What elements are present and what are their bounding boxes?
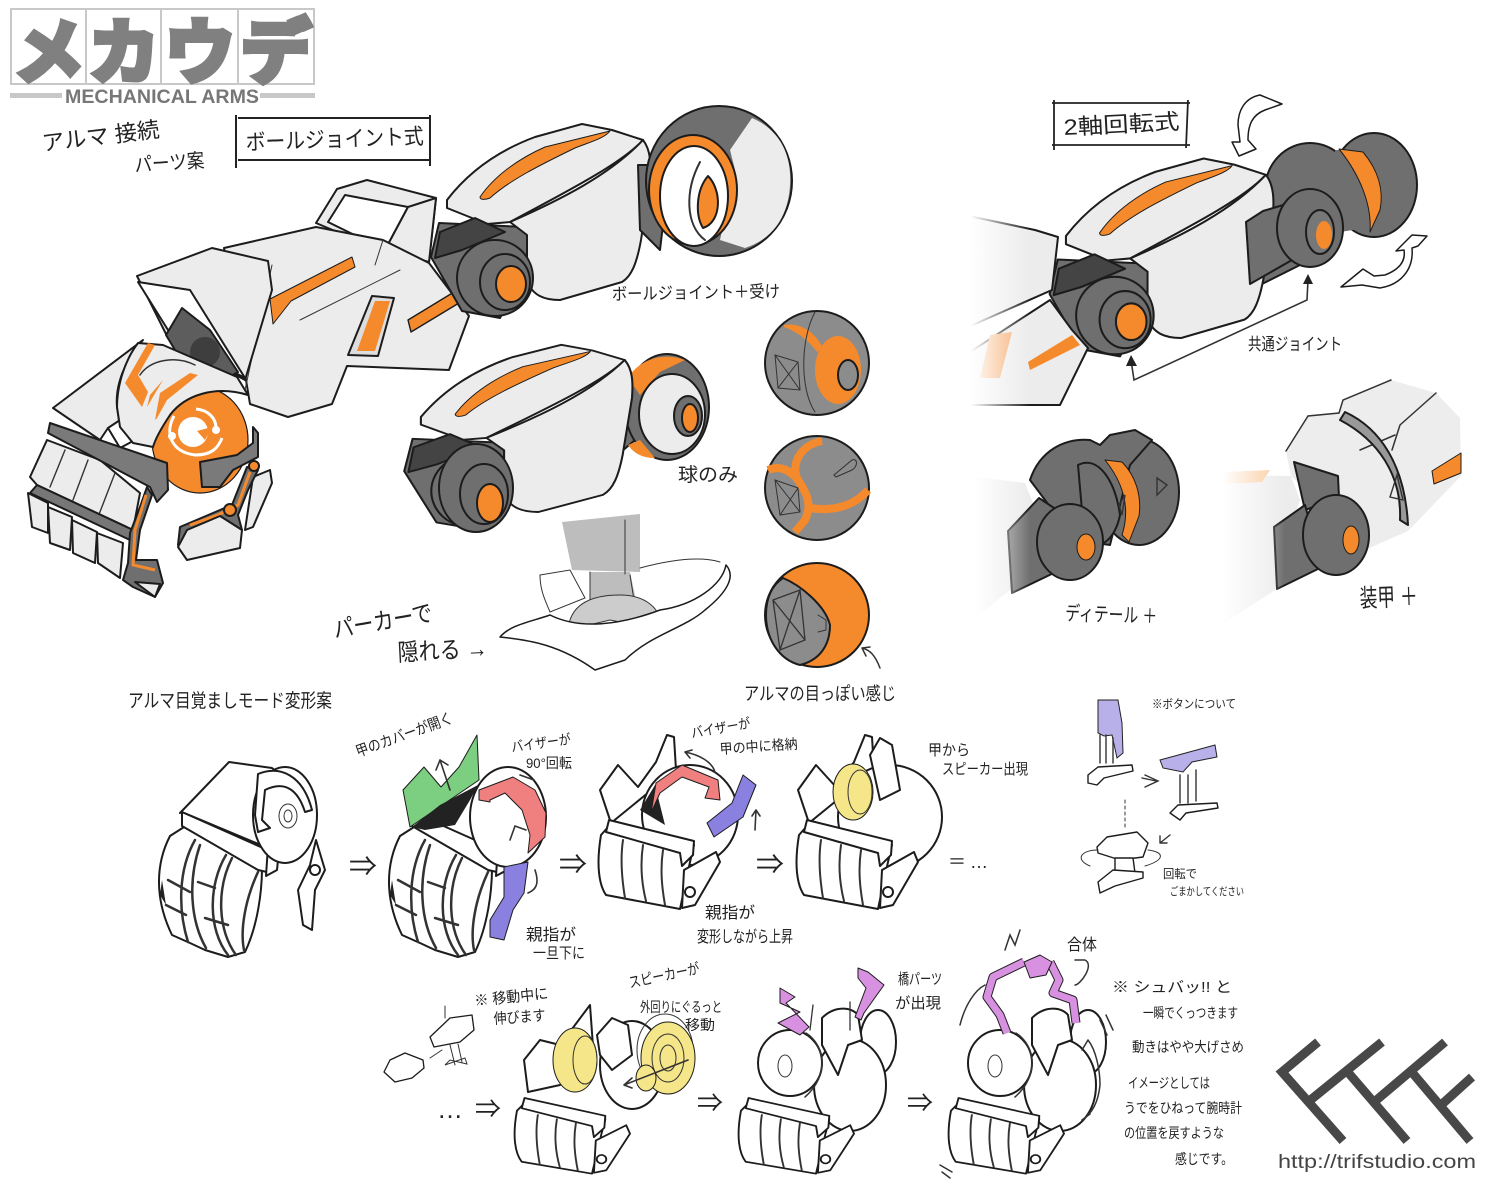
notes on quick snap motion: 一瞬でくっつきます: [1143, 1005, 1238, 1021]
label: like Arma's eye: アルマの目っぽい感じ: [744, 684, 896, 704]
label: combine: 合体: [1067, 936, 1097, 954]
label: visor stored inside back: [690, 715, 798, 757]
notes on quick snap motion: うでをひねって腕時計: [1124, 1100, 1242, 1116]
label: thumb goes down once: 一旦下に: [533, 945, 585, 962]
logo: MECHANICAL ARMS: メ: [14, 14, 84, 92]
fingers: [28, 440, 140, 578]
arrow: ⇒: [907, 1088, 933, 1118]
heading box: two axis rotation type: 2軸回転式: [1063, 109, 1180, 140]
label: speaker appears from back: [928, 742, 1028, 778]
variant: armor plus: [1195, 380, 1461, 640]
step 2 hand: [389, 735, 546, 957]
heading: arm joint parts proposal: [41, 117, 205, 177]
notes on quick snap motion: [1112, 979, 1244, 1167]
label: bridge part appears: [895, 971, 942, 1012]
logo: MECHANICAL ARMS: MECHANICAL ARMS: [65, 87, 259, 108]
step 6 hand: [739, 968, 896, 1174]
yellow speaker: [833, 764, 873, 820]
label: ball only: 球のみ: [678, 464, 738, 486]
label: speaker moves around outside: 外回りにぐるっと: [640, 999, 722, 1015]
label: thumb rises transforming: 変形しながら上昇: [697, 928, 793, 946]
label: bridge part appears: 橋パーツ: [898, 971, 942, 988]
forearm body: [224, 227, 469, 417]
label: visor stored inside back: バイザーが: [690, 715, 752, 741]
variant: detail plus: ディテール ＋: [1065, 602, 1158, 628]
orange ball: [152, 387, 248, 493]
step 1 hand: [159, 762, 325, 957]
module: ball joint plus socket: [431, 106, 792, 318]
yellow speakers: [553, 1028, 597, 1092]
studio logo: [1278, 1042, 1476, 1173]
knuckle bar: [48, 423, 168, 502]
variant: detail plus: [950, 430, 1179, 635]
notes on quick snap motion: 感じです。: [1175, 1151, 1233, 1167]
button notes: [1081, 697, 1244, 898]
label: speaker appears from back: スピーカー出現: [942, 761, 1028, 778]
label: bridge part appears: が出現: [895, 995, 941, 1012]
green cover: [403, 735, 479, 827]
button state 3: [1081, 800, 1160, 893]
step 3 hand: [599, 735, 760, 909]
notes on quick snap motion: 動きはやや大げさめ: [1132, 1039, 1244, 1055]
module: ball only: [404, 345, 709, 532]
button state 1: [1088, 700, 1133, 785]
logo: MECHANICAL ARMS: カ: [89, 14, 159, 92]
label: speaker appears from back: 甲から: [928, 742, 970, 759]
button notes: 回転で: [1163, 867, 1197, 881]
label: ball joint plus socket: ボールジョイント＋受け: [612, 282, 780, 304]
rotation arrow: top: [1232, 95, 1282, 156]
label: thumb rises transforming: [697, 904, 793, 946]
arrow: ⇒: [349, 851, 377, 882]
heading: alarm mode transformation proposal: アルマ目覚ましモード変形案: [128, 690, 332, 712]
heading: arm joint parts proposal: アルマ 接続: [41, 117, 161, 156]
label: hidden by hoodie: [331, 600, 488, 667]
label: like Arma's eye: [744, 647, 896, 704]
callout: common joint arrow: 共通ジョイント: [1248, 335, 1342, 354]
label: thumb goes down once: [526, 926, 585, 962]
upper arm handle: [316, 180, 436, 262]
arrow: ⇒: [697, 1088, 723, 1118]
emblem on orange ball: [168, 409, 222, 455]
label: visor stored inside back: 甲の中に格納: [719, 736, 798, 757]
sphere variant 1: [765, 311, 869, 415]
button state 2: [1160, 745, 1218, 820]
step 5 hand: [515, 1005, 695, 1174]
wrist band and thumb: [178, 427, 272, 560]
blue thumb: [490, 862, 528, 940]
label: back cover opens: 甲のカバーが開く: [354, 710, 455, 761]
logo: MECHANICAL ARMS: [10, 9, 315, 108]
rotation arrow: bottom right: [1341, 235, 1427, 288]
notes on quick snap motion: イメージとしては: [1128, 1075, 1210, 1091]
small speaker extension note: 伸びます: [493, 1007, 546, 1028]
faded arm behind two axis module: [945, 200, 1088, 420]
step 4 hand: [797, 735, 942, 909]
label: visor rotates 90 degrees: 90°回転: [526, 755, 572, 771]
small speaker extension note: ※ 移動中に: [474, 985, 549, 1010]
main arm illustration: [28, 180, 469, 597]
button notes: ※ボタンについて: [1152, 697, 1236, 711]
heading box: two axis rotation type: [1052, 100, 1190, 150]
logo: MECHANICAL ARMS: ウ: [165, 14, 235, 92]
blue visor part: [707, 775, 756, 837]
label: thumb rises transforming: 親指が: [705, 904, 755, 922]
logo: MECHANICAL ARMS: デ: [241, 14, 311, 92]
sphere variant 2: [765, 436, 869, 540]
arrow: ⇒: [559, 849, 587, 880]
heading box: ball joint type: [236, 115, 430, 168]
heading box: ball joint type: ボールジョイント式: [245, 124, 424, 155]
sphere variant 3: [765, 563, 869, 667]
step 7 hand: [940, 930, 1113, 1178]
label: thumb goes down once: 親指が: [526, 926, 576, 944]
small speaker extension note: [384, 985, 549, 1082]
arrow: ⇒: [756, 849, 784, 880]
notes on quick snap motion: ※ シュバッ!! と: [1112, 979, 1232, 996]
red visor: [479, 777, 546, 853]
label: hidden by hoodie: パーカーで: [331, 600, 435, 644]
label: speaker moves around outside: [627, 960, 722, 1033]
hood sketch: [500, 514, 730, 670]
label: hidden by hoodie: 隠れる →: [397, 635, 488, 667]
label: visor rotates 90 degrees: [510, 731, 572, 771]
continuation arrow: …⇒: [437, 1094, 501, 1124]
notes on quick snap motion: の位置を戻すような: [1124, 1125, 1224, 1141]
pink bridge parts: [778, 988, 809, 1035]
note arrows: [1142, 775, 1170, 843]
callout: common joint arrow: [1126, 274, 1342, 380]
variant: armor plus: 装甲 ＋: [1359, 583, 1418, 613]
label: speaker moves around outside: 移動: [685, 1017, 715, 1033]
heading: arm joint parts proposal: パーツ案: [134, 149, 205, 177]
shoulder box: [137, 248, 272, 385]
continuation mark: ＝…: [948, 852, 988, 872]
label: speaker moves around outside: スピーカーが: [627, 960, 701, 992]
label: visor rotates 90 degrees: バイザーが: [510, 731, 572, 755]
module: two axis rotation: [1050, 133, 1417, 356]
hand back and visor: [53, 340, 248, 448]
red visor: [651, 765, 720, 813]
finger tip linkage: [123, 487, 163, 597]
button notes: ごまかしてください: [1170, 884, 1244, 898]
studio logo: http://trifstudio.com: [1278, 1152, 1476, 1173]
